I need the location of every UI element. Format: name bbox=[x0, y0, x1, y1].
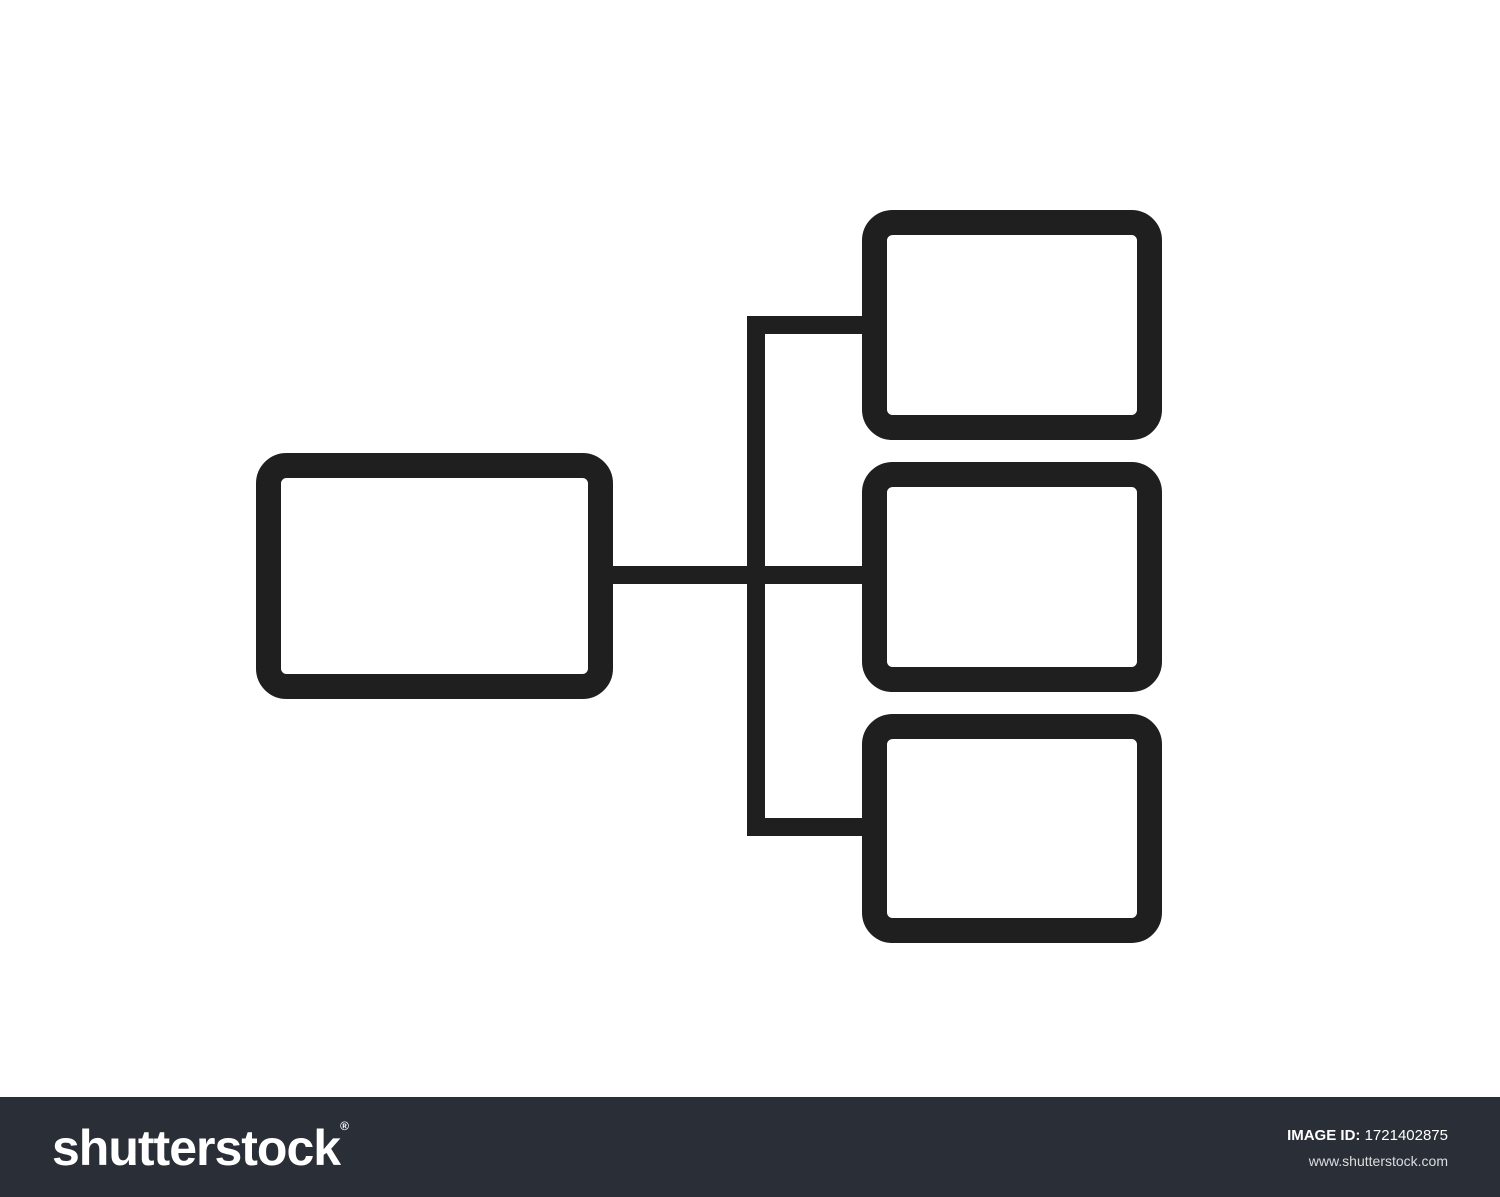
connectors bbox=[600, 325, 870, 827]
footer bar bbox=[0, 1097, 1500, 1197]
root box bbox=[268, 466, 600, 686]
child box 3 bbox=[874, 726, 1150, 930]
website: www.shutterstock.com bbox=[1309, 1153, 1448, 1169]
image id: IMAGE ID: 1721402875 bbox=[1287, 1127, 1448, 1144]
child box 2 bbox=[874, 474, 1150, 680]
logo text: shutterstock® bbox=[52, 1119, 348, 1176]
child box 1 bbox=[874, 222, 1150, 428]
